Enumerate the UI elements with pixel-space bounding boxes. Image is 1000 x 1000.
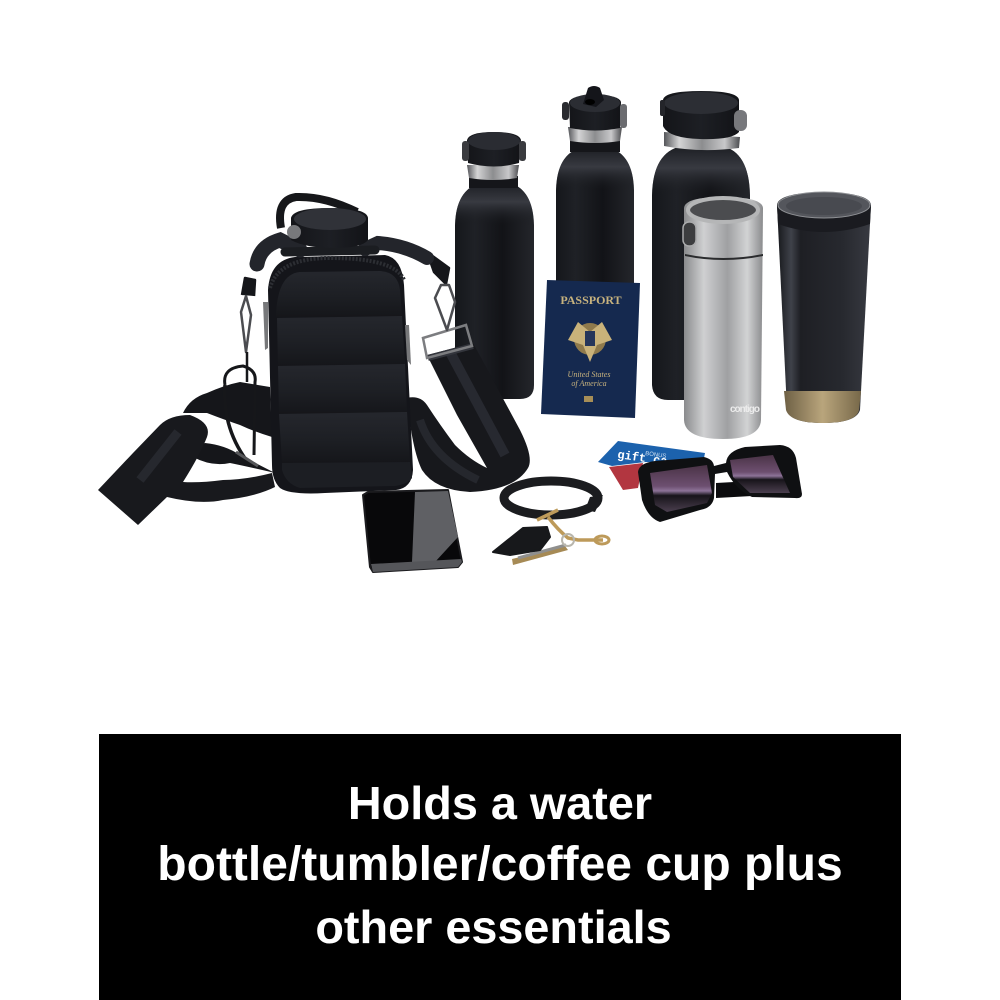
bag hardware: clips (241, 252, 455, 382)
product illustration (98, 86, 871, 573)
crossbody strap: left loop (98, 366, 275, 525)
bottle: left small (455, 132, 534, 399)
water bottle lid with handle (280, 197, 368, 248)
tumbler: black with gold base (777, 192, 871, 423)
caption text (157, 777, 843, 953)
sunglasses (638, 445, 802, 522)
caption text: Holds a water (348, 777, 652, 829)
crossbody strap: right loop (407, 325, 530, 492)
gift card: BONUS (645, 451, 667, 460)
bottle: large back right (652, 91, 750, 400)
gift card (598, 441, 705, 490)
passport (541, 280, 640, 418)
caption banner (99, 734, 901, 1000)
caption text: bottle/tumbler/coffee cup plus (157, 838, 843, 891)
passport: United States (568, 370, 610, 379)
keyring and keys (493, 481, 609, 565)
quilted bag (263, 255, 413, 493)
smartphone (363, 490, 462, 572)
bottle: center with straw lid (556, 86, 634, 300)
caption text: other essentials (315, 901, 672, 953)
passport: PASSPORT (560, 293, 622, 307)
passport: of America (571, 379, 607, 388)
travel mug: steel (683, 197, 763, 439)
gift card: gift ca (616, 448, 668, 469)
padded shoulder collar (257, 240, 427, 264)
travel mug: steel: contigo (730, 404, 760, 415)
